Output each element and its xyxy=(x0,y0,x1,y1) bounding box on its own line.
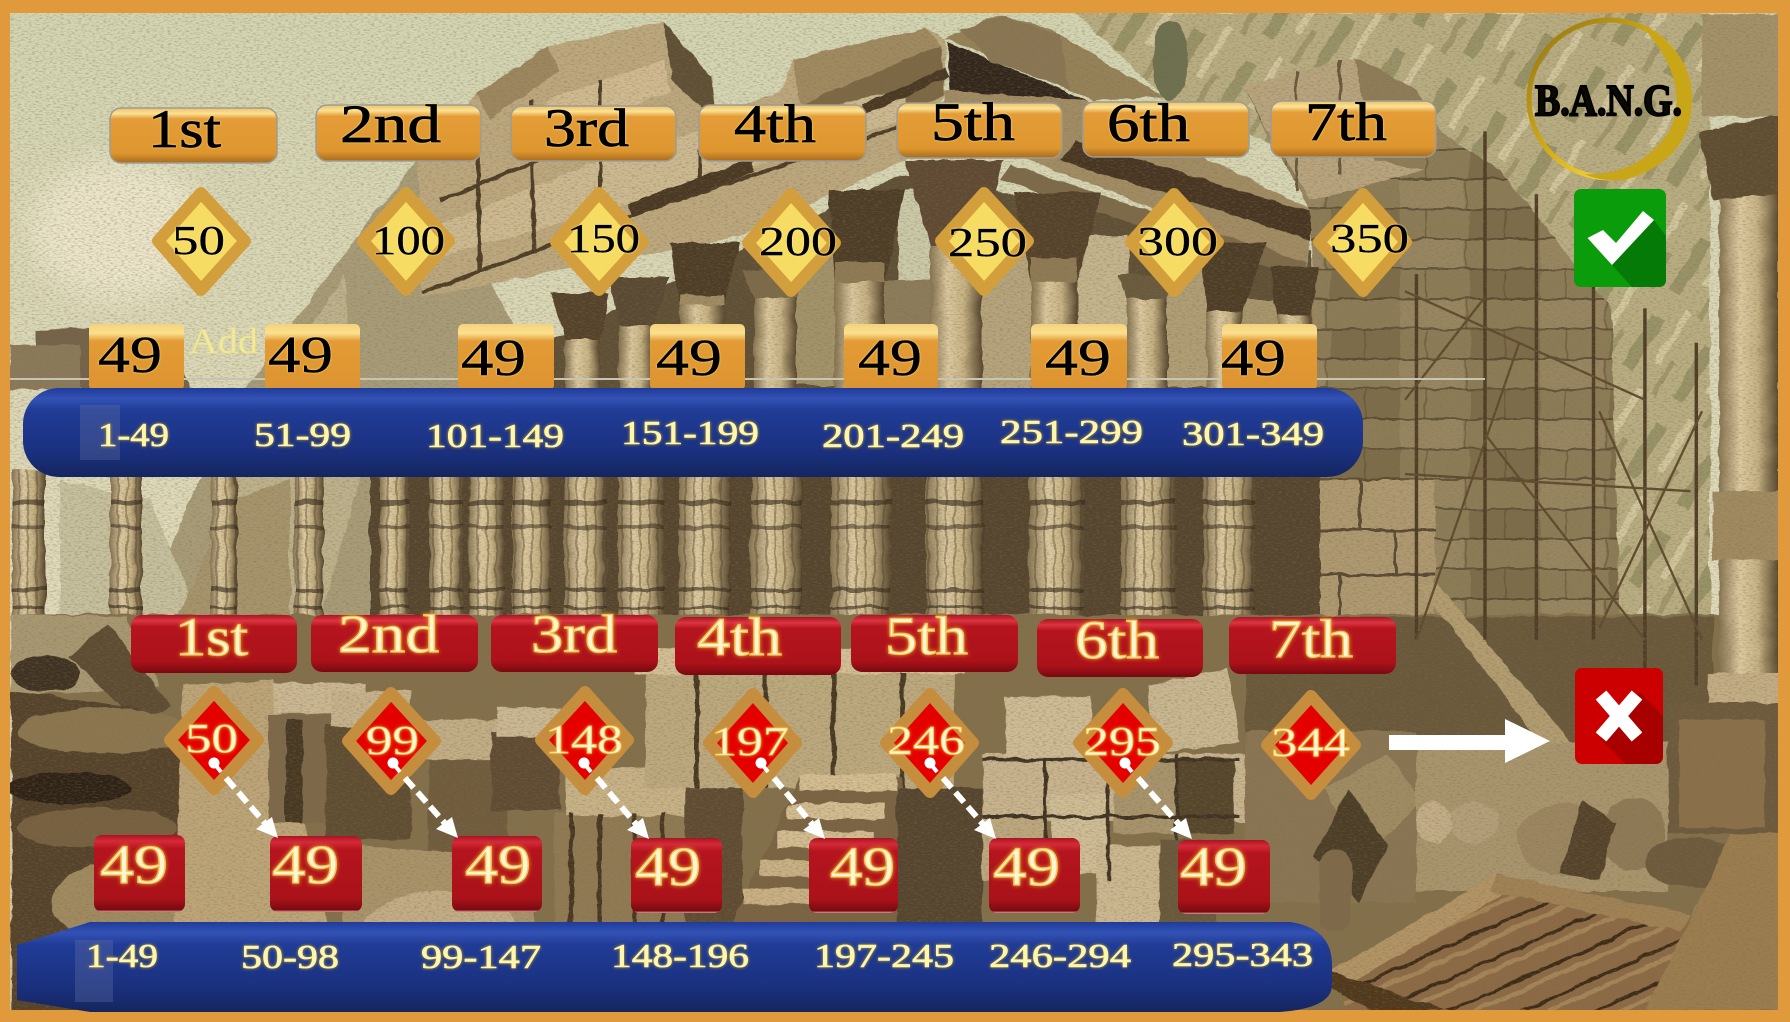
icon: red cross tile xyxy=(1575,668,1663,764)
range 151-199: 151-199 xyxy=(621,415,759,452)
red box 49 #6: 49 xyxy=(993,836,1060,897)
label: Add: Add xyxy=(189,321,258,361)
blue range bar: top xyxy=(23,388,1363,477)
left temple wing xyxy=(418,22,945,297)
red row heading: 5th: 5th xyxy=(885,606,968,666)
dashed arrow 1 xyxy=(208,758,278,838)
red row heading: 3rd: 3rd xyxy=(531,604,617,664)
red row heading: 6th xyxy=(1037,610,1203,677)
gold row heading: 5th xyxy=(897,92,1062,158)
red diamond: 344 xyxy=(1267,696,1355,794)
red box 49 #3: 49 xyxy=(465,834,531,895)
gold row heading: 2nd: 2nd xyxy=(340,94,441,154)
thin horizontal line xyxy=(10,378,1485,380)
icon: green check tile xyxy=(1574,189,1666,287)
low ruin left xyxy=(35,325,190,388)
side wall xyxy=(1242,57,1620,650)
red diamond: 295 xyxy=(1079,694,1167,792)
range 295-343: 295-343 xyxy=(1172,937,1313,974)
gold box 49 #4: 49 xyxy=(656,330,722,387)
gold diamond: 350 xyxy=(1319,194,1409,291)
range 50-98: 50-98 xyxy=(241,939,339,976)
blue range bar: bottom xyxy=(17,922,1332,1012)
gold box 49 #7 xyxy=(1221,324,1317,390)
gold diamond: 200 xyxy=(748,194,837,291)
gold box 49 #6: 49 xyxy=(1045,330,1111,387)
lower temple interior xyxy=(370,470,1320,620)
gold row heading: 3rd: 3rd xyxy=(544,98,629,158)
red box 49 #2: 49 xyxy=(272,834,339,895)
red box 49 #3 xyxy=(452,834,542,912)
dashed arrow 3 xyxy=(578,758,649,839)
gold diamond: 250: 250 xyxy=(948,219,1027,265)
range 1-49: 1-49 xyxy=(98,417,169,454)
red row heading: 4th xyxy=(675,607,841,675)
logo: B.A.N.G. ring: B.A.N.G. xyxy=(1535,76,1682,125)
red row heading: 3rd xyxy=(491,604,658,672)
gold box 49 #5: 49 xyxy=(858,330,922,387)
gold box 49 #3: 49 xyxy=(461,330,526,387)
red diamond: 50: 50 xyxy=(185,715,238,761)
gold box 49 #5 xyxy=(844,324,938,390)
gold row heading: 5th: 5th xyxy=(931,92,1015,152)
gold row heading: 4th: 4th xyxy=(734,94,816,154)
gold box 49 #3 xyxy=(458,324,554,390)
gold row heading: 7th xyxy=(1271,92,1436,157)
red row heading: 6th: 6th xyxy=(1075,610,1159,670)
gold box 49 #7: 49 xyxy=(1221,330,1286,387)
range 301-349: 301-349 xyxy=(1182,416,1324,453)
gold diamond: 350: 350 xyxy=(1330,215,1409,261)
lower columns xyxy=(12,470,45,620)
gold row heading: 1st: 1st xyxy=(148,99,221,159)
gold diamond: 300 xyxy=(1131,194,1218,291)
dashed arrow 4 xyxy=(756,758,825,839)
red row heading: 2nd: 2nd xyxy=(338,604,439,664)
gold diamond: 50 xyxy=(158,193,245,290)
red box 49 #6 xyxy=(989,836,1080,913)
red row heading: 2nd xyxy=(311,604,478,672)
red diamond: 295: 295 xyxy=(1083,718,1161,764)
scaffolding xyxy=(1405,131,1702,685)
red diamond: 246 xyxy=(886,694,973,792)
gold diamond: 150: 150 xyxy=(567,215,640,261)
gold box 49 #4 xyxy=(650,324,745,390)
gold row heading: 7th: 7th xyxy=(1305,92,1387,152)
range 197-245: 197-245 xyxy=(814,938,954,975)
gold diamond: 250 xyxy=(941,193,1028,290)
red diamond: 99: 99 xyxy=(366,717,419,763)
red box 49 #1 xyxy=(94,834,185,912)
gold diamond: 300: 300 xyxy=(1137,218,1218,264)
gold box 49 #2 xyxy=(265,324,360,390)
red diamond: 197 xyxy=(709,694,796,792)
red box 49 #1: 49 xyxy=(100,834,168,895)
dashed arrow 5 xyxy=(924,758,996,839)
gold diamond: 100 xyxy=(363,193,449,290)
range 51-99: 51-99 xyxy=(254,417,351,454)
range 148-196: 148-196 xyxy=(611,938,749,975)
gold row heading: 3rd xyxy=(511,98,676,161)
red box 49 #4 xyxy=(631,836,722,913)
range 251-299: 251-299 xyxy=(1000,414,1143,451)
range 201-249: 201-249 xyxy=(822,418,964,455)
gold box 49 #2: 49 xyxy=(268,327,333,384)
range 99-147: 99-147 xyxy=(421,939,541,976)
red diamond: 148 xyxy=(541,692,628,789)
red box 49 #5: 49 xyxy=(830,836,895,897)
far right column xyxy=(1719,183,1779,685)
gold row heading: 1st xyxy=(110,99,277,163)
gold row heading: 2nd xyxy=(316,94,481,161)
red diamond: 197: 197 xyxy=(711,718,789,764)
gold row heading: 6th xyxy=(1083,93,1249,157)
red diamond: 148: 148 xyxy=(545,716,623,762)
gold diamond: 150 xyxy=(556,193,643,290)
red box 49 #2 xyxy=(270,834,362,912)
upper columns xyxy=(565,337,600,397)
arrow: white arrow to cross xyxy=(1389,719,1550,763)
range 1-49: 1-49 xyxy=(86,938,158,975)
red box 49 #5 xyxy=(809,836,898,913)
gold diamond: 50: 50 xyxy=(172,217,225,263)
gold row heading: 6th: 6th xyxy=(1107,93,1190,153)
dashed arrow 6 xyxy=(1120,758,1192,839)
gold box 49 #6 xyxy=(1031,324,1127,390)
right hillside xyxy=(1075,13,1710,650)
gold diamond: 200: 200 xyxy=(759,218,837,264)
logo: B.A.N.G. ring xyxy=(1529,20,1692,180)
dashed arrow 2 xyxy=(388,758,458,838)
red box 49 #7 xyxy=(1178,836,1270,914)
red row heading: 4th: 4th xyxy=(697,607,782,667)
red box 49 #7: 49 xyxy=(1180,836,1247,897)
red box 49 #4: 49 xyxy=(635,836,701,897)
red diamond: 50 xyxy=(170,692,258,789)
red row heading: 1st: 1st xyxy=(175,607,248,667)
red diamond: 246: 246 xyxy=(887,717,965,763)
red row heading: 7th xyxy=(1229,609,1396,674)
red row heading: 1st xyxy=(131,607,297,673)
range 246-294: 246-294 xyxy=(989,938,1131,975)
far hills xyxy=(140,150,520,620)
gold box 49 #1: 49 xyxy=(98,327,162,384)
red diamond: 99 xyxy=(348,693,435,789)
red diamond: 344: 344 xyxy=(1271,719,1350,765)
gold box 49 #1 xyxy=(89,324,184,390)
range 101-149: 101-149 xyxy=(426,418,564,455)
temple interior xyxy=(540,175,1325,475)
right temple wing xyxy=(945,15,1165,100)
red row heading: 7th: 7th xyxy=(1269,609,1353,669)
red row heading: 5th xyxy=(851,606,1018,672)
gold diamond: 100: 100 xyxy=(372,217,445,263)
gold row heading: 4th xyxy=(699,94,866,161)
